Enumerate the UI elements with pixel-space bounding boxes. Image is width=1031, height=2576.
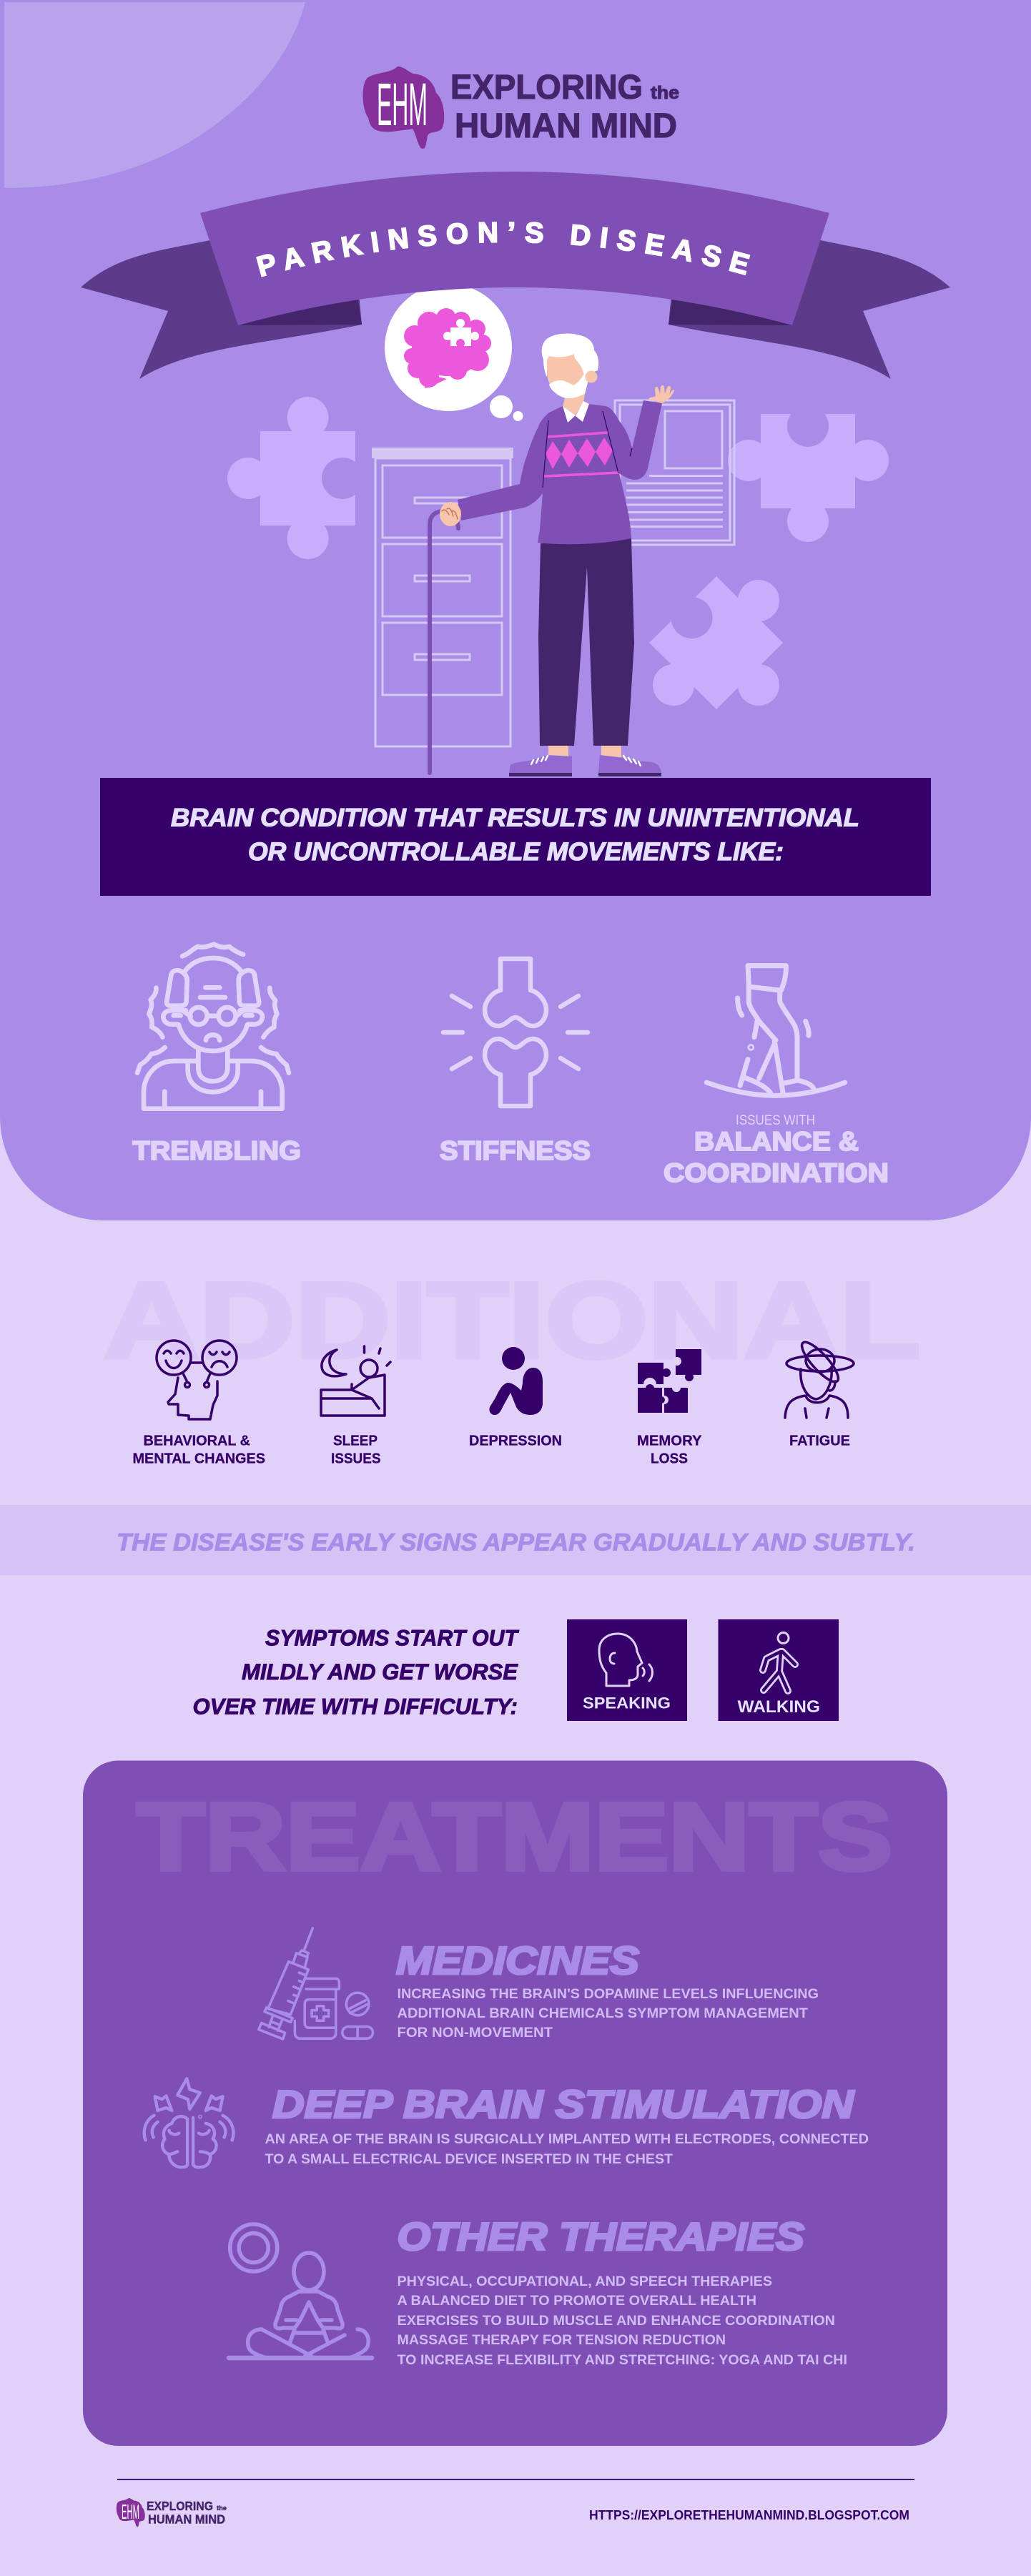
icon: dizzy person — [785, 1338, 854, 1418]
symptom: trembling — [133, 944, 301, 1165]
label: DEPRESSION — [469, 1433, 562, 1449]
intro banner — [100, 778, 931, 896]
logo wordmark — [450, 69, 679, 145]
ribbon front — [200, 172, 829, 325]
description — [265, 2132, 869, 2167]
card: walking — [718, 1619, 839, 1721]
additional: behavioral and mental changes — [133, 1341, 265, 1467]
label: SLEEP — [333, 1433, 378, 1449]
band: early signs — [0, 1505, 1031, 1575]
intro banner: OR UNCONTROLLABLE MOVEMENTS LIKE: — [248, 838, 784, 866]
sweater — [458, 400, 662, 544]
title text: PARKINSON’S DISEASE — [256, 222, 751, 277]
shoes — [509, 755, 661, 776]
footer — [117, 2479, 914, 2527]
text: symptoms progression: SYMPTOMS START OUT — [265, 1624, 520, 1650]
label: COORDINATION — [664, 1158, 889, 1188]
icon: meditating figure — [229, 2224, 372, 2358]
label: STIFFNESS — [440, 1136, 591, 1165]
label: BEHAVIORAL & — [143, 1433, 250, 1449]
logo wordmark: HUMAN MIND — [455, 107, 677, 145]
ribbon tail right — [669, 236, 950, 379]
description: TO INCREASE FLEXIBILITY AND STRETCHING: YOGA AND TAI CHI — [398, 2353, 847, 2368]
label: MEMORY — [637, 1433, 702, 1449]
puzzle piece left — [227, 397, 363, 559]
sweater pattern — [543, 411, 632, 488]
raised hand — [648, 385, 674, 403]
label: TREMBLING — [133, 1136, 301, 1165]
description: PHYSICAL, OCCUPATIONAL, AND SPEECH THERAPIES — [398, 2274, 772, 2289]
puzzle piece right — [728, 405, 889, 542]
icon: unsteady legs — [706, 966, 845, 1095]
website url: HTTPS://EXPLORETHEHUMANMIND.BLOGSPOT.COM — [589, 2508, 909, 2522]
cane — [430, 511, 458, 773]
intro banner: BRAIN CONDITION THAT RESULTS IN UNINTENTIONAL — [171, 804, 859, 832]
corner decoration — [4, 2, 305, 188]
panel: treatments — [83, 1760, 947, 2446]
beard — [549, 373, 588, 398]
label: FATIGUE — [789, 1433, 850, 1449]
collar — [563, 401, 589, 423]
label: LOSS — [651, 1450, 688, 1467]
footer logo — [117, 2498, 227, 2527]
symptom: balance and coordination — [664, 966, 889, 1188]
additional: fatigue — [785, 1338, 854, 1449]
icon: person awake in bed — [321, 1346, 390, 1416]
panel: hero section — [0, 0, 1031, 1220]
text: symptoms progression: OVER TIME WITH DIFFICULTY: — [193, 1693, 518, 1719]
heading: MEDICINES — [396, 1938, 639, 1983]
label — [331, 1433, 380, 1467]
label — [637, 1433, 702, 1467]
footer logo: HUMAN MIND — [148, 2512, 225, 2527]
description: FOR NON-MOVEMENT — [398, 2025, 553, 2040]
icon: syringe and pills — [259, 1928, 373, 2039]
description: ADDITIONAL BRAIN CHEMICALS SYMPTOM MANAGEMENT — [398, 2006, 808, 2021]
description: EXERCISES TO BUILD MUSCLE AND ENHANCE COORDINATION — [398, 2314, 835, 2329]
description — [398, 1987, 819, 2040]
icon: two faces — [157, 1341, 237, 1419]
hair — [542, 333, 598, 377]
description: A BALANCED DIET TO PROMOTE OVERALL HEALTH — [398, 2294, 756, 2309]
face — [547, 354, 588, 415]
ribbon fold right — [669, 297, 792, 325]
description: MASSAGE THERAPY FOR TENSION REDUCTION — [398, 2333, 726, 2348]
heading: OTHER THERAPIES — [398, 2214, 804, 2259]
logo wordmark: EXPLORING — [450, 69, 643, 107]
document — [615, 400, 734, 545]
text: symptoms progression — [193, 1624, 520, 1719]
icon: seated figure — [489, 1347, 543, 1415]
label — [664, 1113, 889, 1188]
hand with cane — [440, 502, 461, 526]
label: ISSUES WITH — [736, 1113, 815, 1128]
ankles — [548, 744, 621, 758]
trousers — [538, 538, 634, 746]
heading: additional (watermark): ADDITIONAL — [104, 1260, 920, 1380]
icon: walking person — [763, 1633, 795, 1691]
ribbon fold left — [239, 297, 362, 325]
label: BALANCE & — [694, 1127, 859, 1156]
ear — [585, 370, 598, 383]
text: symptoms progression: MILDLY AND GET WORSE — [242, 1659, 518, 1684]
icon: brain with lightning — [144, 2078, 234, 2167]
heading: treatments (watermark): TREATMENTS — [137, 1784, 892, 1890]
band: early signs: THE DISEASE'S EARLY SIGNS APPEAR GRADUALLY AND SUBTLY. — [117, 1529, 915, 1556]
puzzle piece lower — [649, 576, 783, 709]
label — [133, 1433, 265, 1467]
label: MENTAL CHANGES — [133, 1450, 265, 1467]
description: AN AREA OF THE BRAIN IS SURGICALLY IMPLANTED WITH ELECTRODES, CONNECTED — [265, 2132, 869, 2147]
label: SPEAKING — [583, 1694, 671, 1712]
treatment: medicines — [259, 1928, 819, 2040]
description: INCREASING THE BRAIN'S DOPAMINE LEVELS INFLUENCING — [398, 1987, 819, 2002]
symptom: stiffness — [440, 959, 591, 1165]
filing cabinet — [372, 448, 513, 746]
header logo — [363, 66, 679, 149]
logo brain mark — [363, 66, 444, 149]
label: WALKING — [738, 1697, 820, 1717]
logo brain mark: EHM — [377, 71, 428, 138]
heading: DEEP BRAIN STIMULATION — [272, 2082, 854, 2126]
description — [398, 2274, 847, 2368]
icon: trembling man — [137, 944, 289, 1109]
description: TO A SMALL ELECTRICAL DEVICE INSERTED IN THE CHEST — [265, 2152, 673, 2167]
card: speaking — [567, 1619, 687, 1721]
additional: depression — [469, 1347, 562, 1449]
title ribbon — [81, 172, 950, 379]
ribbon tail left — [81, 236, 362, 379]
thought bubble — [385, 284, 523, 421]
icon: speaking head — [599, 1634, 652, 1686]
footer logo: EXPLORING — [147, 2499, 213, 2513]
icon: knee joint — [443, 959, 588, 1106]
footer logo: EHM — [122, 2501, 139, 2524]
additional: memory loss — [637, 1349, 702, 1467]
treatment: other therapies — [229, 2214, 847, 2368]
treatment: deep brain stimulation — [144, 2078, 869, 2167]
logo wordmark: the — [651, 83, 679, 103]
label: ISSUES — [331, 1450, 380, 1467]
brain with puzzle — [404, 308, 491, 388]
person: elderly man with cane — [430, 333, 674, 776]
additional: sleep issues — [321, 1346, 390, 1467]
footer logo: the — [217, 2505, 227, 2512]
icon: puzzle pieces — [638, 1349, 701, 1413]
